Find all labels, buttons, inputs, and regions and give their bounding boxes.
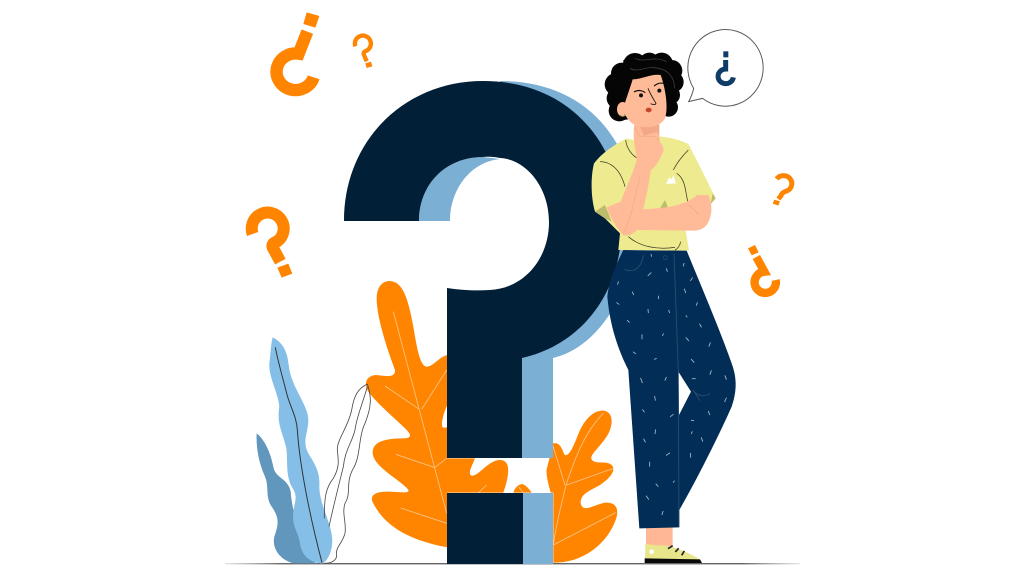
question mark dot block xyxy=(447,493,523,564)
right orange leaf xyxy=(547,411,617,563)
ground line xyxy=(225,563,800,564)
face xyxy=(623,75,667,127)
shadow inner arc xyxy=(419,157,500,221)
shirt logo xyxy=(666,175,676,184)
light blue plant leaf xyxy=(269,337,332,563)
foot skin xyxy=(646,527,673,546)
shirt creases xyxy=(600,140,688,250)
hair strands xyxy=(630,58,674,88)
neck xyxy=(637,120,659,142)
small orange fragment xyxy=(513,484,532,493)
large orange question mark left xyxy=(252,213,292,278)
small orange question mark right xyxy=(773,176,792,206)
eyes, brows, nose, mouth, earring xyxy=(620,83,663,116)
speech bubble xyxy=(688,30,763,106)
giant question mark shadow xyxy=(500,81,636,458)
right leaf veins xyxy=(518,413,616,545)
giant question mark xyxy=(344,81,622,458)
large leaf veins xyxy=(385,312,487,523)
ear xyxy=(617,102,628,117)
shirt shadow xyxy=(595,193,716,222)
small orange question mark top xyxy=(355,36,372,68)
plants and leaves xyxy=(257,281,617,563)
shadow lower block xyxy=(522,493,553,564)
shirt xyxy=(592,137,716,251)
arms and hand xyxy=(607,122,711,236)
shoe sole xyxy=(645,558,702,563)
dark blue plant leaf xyxy=(257,433,316,563)
shoe laces xyxy=(668,546,684,555)
person xyxy=(592,30,763,563)
pants body xyxy=(607,250,736,528)
pants speckles xyxy=(617,254,726,515)
orange inverted question mark top left xyxy=(277,12,319,90)
shoe xyxy=(645,543,701,560)
orange inverted question mark right xyxy=(748,245,776,293)
curly hair xyxy=(605,53,684,121)
plant vein xyxy=(275,347,322,563)
large orange leaf xyxy=(366,281,508,547)
pants seams xyxy=(624,253,710,527)
outlined white plant leaf xyxy=(324,384,370,563)
bubble inverted question mark xyxy=(718,51,733,84)
arm lines xyxy=(623,127,698,233)
trousers xyxy=(607,250,736,563)
